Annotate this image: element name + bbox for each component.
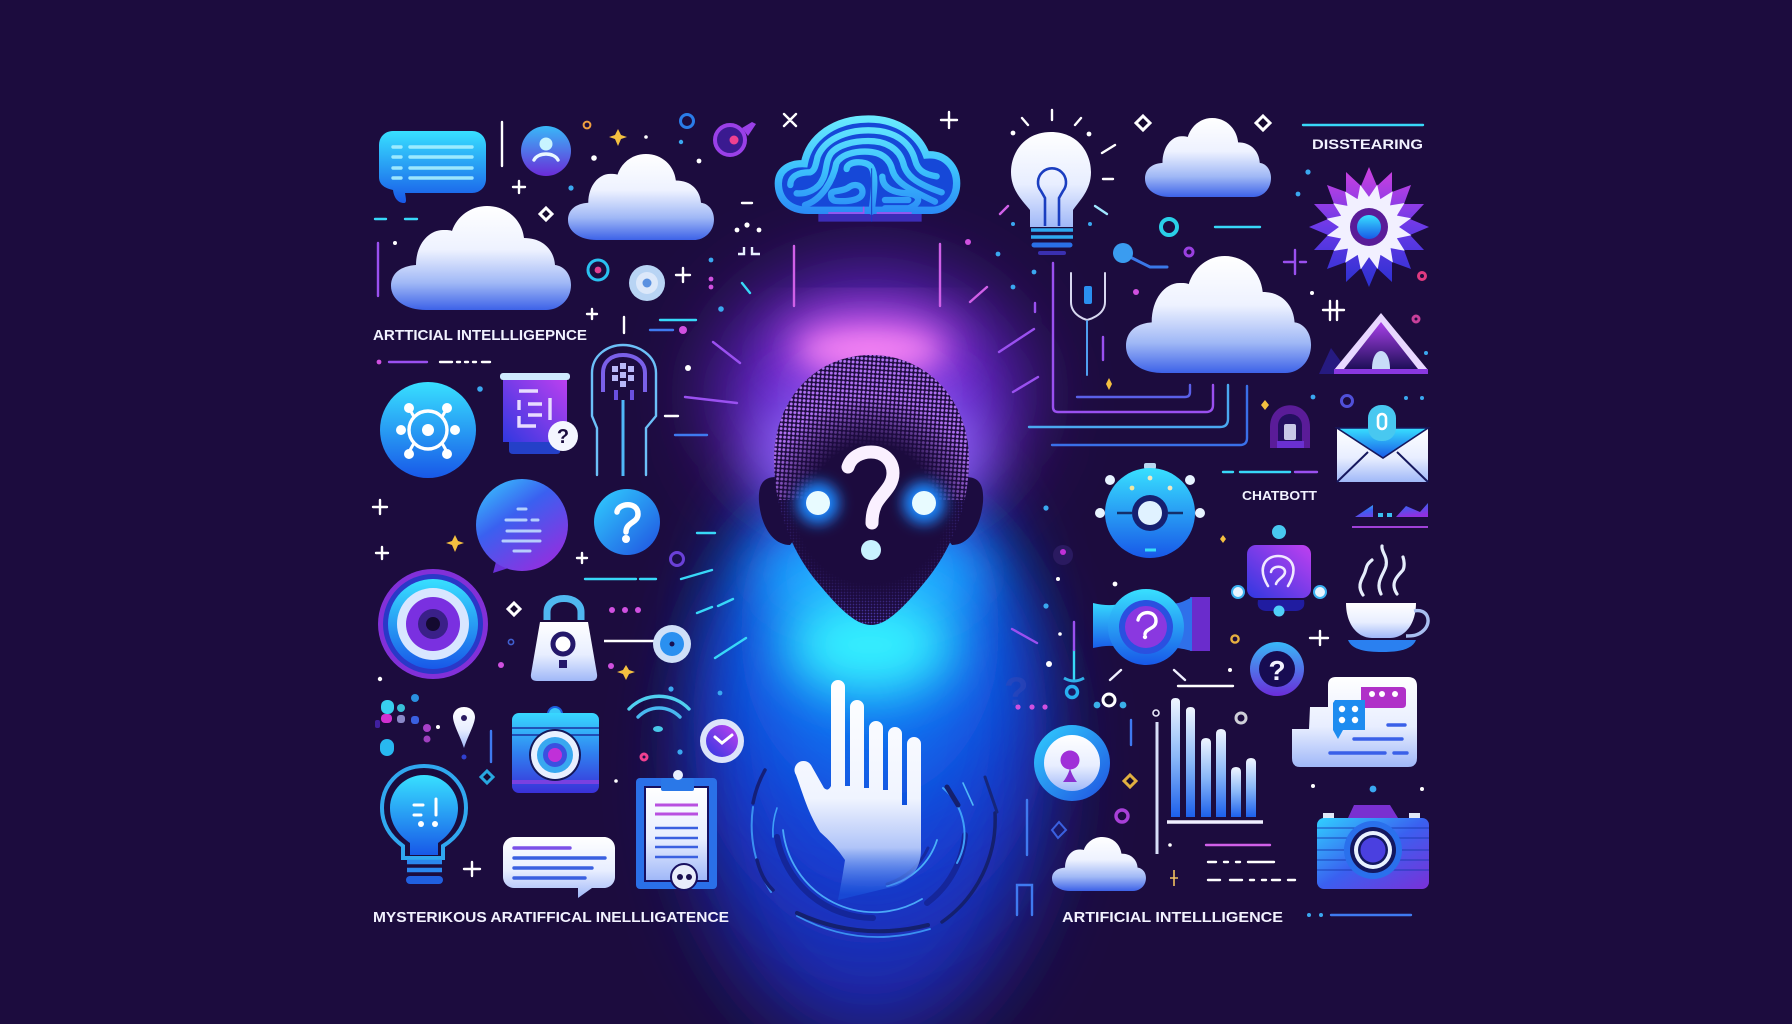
head silhouette with question mark — [759, 355, 983, 625]
head shape — [774, 355, 969, 625]
icon: person circle — [521, 126, 571, 176]
icon: wifi — [629, 696, 689, 732]
icon: cloud left large — [391, 206, 571, 310]
icon: camera left — [512, 707, 599, 793]
icon: circuit capsule — [592, 345, 656, 476]
question mark — [848, 452, 893, 523]
ripple arcs — [752, 770, 997, 937]
small dots — [378, 135, 1424, 847]
disc left — [595, 265, 1126, 708]
icon: left pin — [453, 707, 475, 760]
icon: envelope — [1337, 405, 1428, 482]
icon: camera bottom right — [1317, 805, 1429, 889]
icon: white chat — [503, 837, 615, 898]
icon: padlock bag — [531, 598, 597, 681]
diamonds — [481, 116, 1270, 838]
icon: triangle — [1319, 313, 1428, 374]
icon: question bubble — [1232, 525, 1326, 616]
icon: check circle — [700, 719, 744, 763]
hand shape — [794, 680, 921, 900]
icon: purple document — [500, 373, 578, 454]
faint question mark: ? — [1004, 670, 1028, 714]
icon: purple lens — [715, 122, 756, 155]
label: artificial intelligence bottom: ARTIFICIAL INTELLLIGENCE — [1062, 909, 1283, 926]
label: artificial intelligence top: ARTTICIAL INTELLLIGEPNCE — [373, 328, 587, 344]
icon: chat bubble — [379, 131, 486, 203]
icon: hub circle — [380, 382, 476, 478]
icon: cloud top left small — [568, 154, 714, 240]
icon: key lens — [604, 625, 691, 663]
halftone mesh lower — [778, 500, 964, 625]
icon: coffee cup — [1346, 546, 1428, 652]
sparkles and small marks — [373, 112, 1428, 917]
icon: question circle small — [1250, 642, 1304, 696]
icon: triangle strip — [1352, 503, 1428, 527]
icon: camera with question — [1093, 589, 1210, 680]
icon: gear disc — [1095, 463, 1205, 558]
icon: webcam circle — [1034, 725, 1110, 801]
icon: lightbulb left — [382, 766, 466, 880]
bar chart — [1153, 698, 1263, 854]
icon: clipboard — [636, 770, 717, 890]
icon: question circle — [594, 489, 660, 555]
central glow — [695, 275, 1045, 1024]
ears — [759, 477, 983, 545]
icon: cloud right large — [1126, 256, 1311, 373]
icon: cloud small bottom — [1052, 837, 1146, 891]
icon: chat document — [1292, 677, 1417, 767]
label: chatbott: CHATBOTT — [1242, 489, 1317, 503]
icon: cloud top right — [1145, 118, 1271, 197]
question badge: ? — [557, 426, 569, 448]
question dot — [861, 540, 881, 560]
halftone mesh upper — [774, 355, 969, 500]
label: mysterious artificial intelligence: MYSTERIKOUS ARATIFFICAL INELLLIGATENCE — [373, 909, 729, 926]
glowing eyes — [797, 482, 945, 524]
icon: small padlock — [1270, 405, 1310, 448]
label: disstearing: DISSTEARING — [1312, 136, 1423, 152]
icon: target eye — [378, 569, 488, 679]
icon: speech circle — [476, 479, 568, 573]
icon: brain — [778, 119, 957, 222]
circuit lines under cloud — [1029, 243, 1247, 445]
dot cluster — [375, 694, 440, 756]
icon: lightbulb right — [1011, 110, 1115, 253]
rings — [508, 114, 1425, 822]
icon: starburst — [1309, 167, 1429, 287]
icon: raised hand with ripples — [752, 680, 997, 937]
icon: question circle small: ? — [1268, 655, 1286, 686]
